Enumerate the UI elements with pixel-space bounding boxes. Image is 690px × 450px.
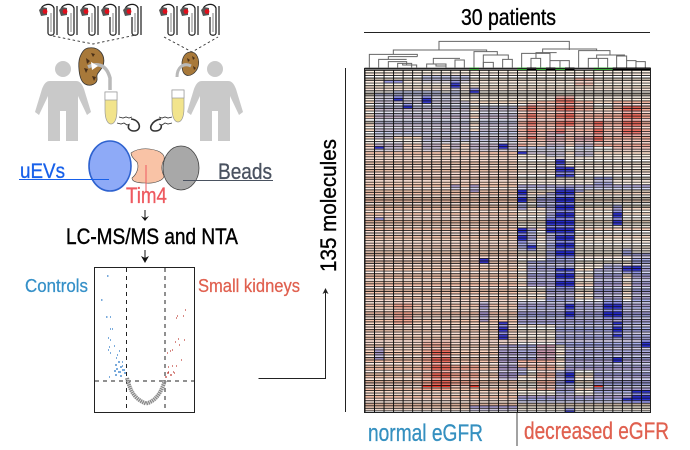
nephrons: left group [39, 4, 141, 35]
heading: 30 patients: 30 patients [461, 4, 556, 30]
patients axis line [364, 32, 650, 34]
person: right [187, 61, 243, 141]
curved arrow right [151, 117, 172, 131]
label: 135 molecules: 135 molecules [316, 139, 341, 272]
dark blue blocks [374, 80, 650, 413]
label: uEVs [19, 160, 109, 183]
label: Beads [183, 159, 273, 184]
salmon wash [364, 146, 517, 410]
dotted lines from nephrons to kidneys [53, 35, 218, 52]
label: Controls: Controls [25, 276, 88, 296]
heatmap outline [364, 68, 650, 412]
strong red blocks [393, 95, 641, 385]
group divider [516, 413, 518, 446]
column lines [364, 70, 650, 413]
red small-kidney points [165, 310, 186, 377]
label: Tim4 [126, 165, 167, 208]
row lines [364, 70, 650, 413]
blue control points [101, 276, 126, 377]
person: left [35, 61, 91, 141]
label: Small kidneys: Small kidneys [198, 276, 300, 296]
light red blocks [393, 78, 650, 390]
molecule axis line [344, 68, 346, 412]
light blue blocks [374, 75, 593, 156]
dendrogram [369, 41, 645, 68]
heading: LC-MS/MS and NTA: LC-MS/MS and NTA [66, 224, 238, 249]
label: uEVs: uEVs [20, 160, 65, 183]
label: Tim4: Tim4 [126, 183, 167, 208]
gray non-significant points [127, 378, 165, 404]
nephrons: right group [159, 4, 219, 35]
icon: small kidney [177, 52, 199, 77]
heatmap: 135 molecules by 30 patients [365, 70, 650, 412]
uEV vesicle [89, 141, 131, 191]
icon: urine tube right [172, 90, 184, 122]
arrow to volcano plot [141, 250, 149, 263]
white row stripes over blocks [364, 70, 650, 413]
medium blue blocks [374, 177, 650, 410]
Tim4 protein [131, 149, 164, 183]
gray bands [364, 90, 650, 410]
icon: urine tube left [105, 92, 117, 124]
bead [163, 146, 199, 190]
icon: large kidney [79, 48, 110, 90]
label: normal eGFR: normal eGFR [368, 420, 483, 447]
volcano plot [94, 268, 194, 412]
label: Beads: Beads [218, 159, 272, 184]
arrow to LC-MS/MS [141, 210, 149, 221]
bright red lines [422, 385, 603, 387]
cluster colour bar [364, 68, 651, 70]
curved arrow left [117, 117, 139, 131]
arrow: volcano to heatmap [258, 288, 328, 378]
